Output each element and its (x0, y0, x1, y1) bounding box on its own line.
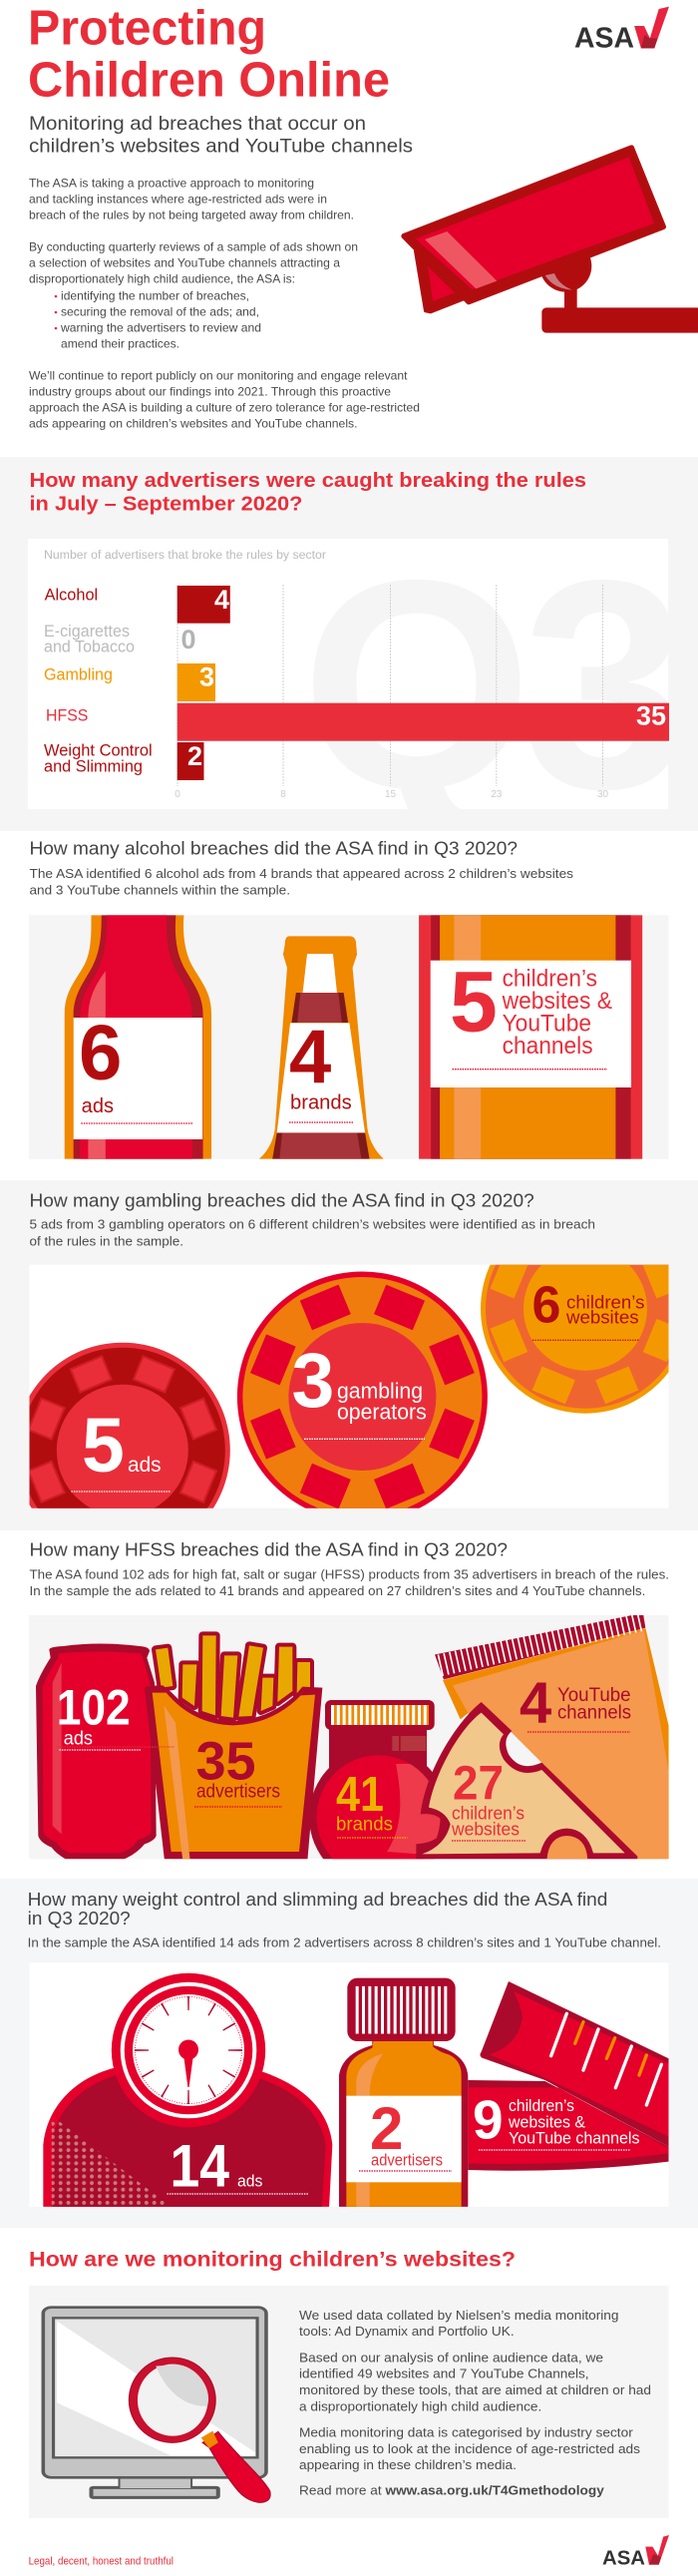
stat: 2 advertisers (359, 2095, 452, 2171)
intro text: We’ll continue to report publicly on our monitoring and engage relevant (29, 369, 408, 383)
stat: 27 children's websites: websites (451, 1818, 520, 1839)
bar: Alcohol (45, 585, 230, 624)
panel: gambling (30, 1265, 668, 1508)
stat: 5 ads (71, 1403, 171, 1492)
gridlines and axis ticks: 0 (174, 789, 180, 800)
bar: E-cigarettes and Tobacco: 0 (181, 625, 196, 654)
stat: 35 advertisers: 35 (195, 1731, 256, 1791)
title: Protecting (28, 2, 266, 56)
icon: bottle one: 6 (79, 1009, 122, 1096)
stat: 27 children's websites: children’s (452, 1802, 524, 1823)
bar: Weight Control and Slimming (44, 740, 203, 780)
icon: bottle three: children’s (503, 965, 597, 992)
panel: alcohol (29, 915, 668, 1159)
chart subtitle: Number of advertisers that broke the rules by sector (44, 550, 326, 562)
text: methodology: Media monitoring data is categorised by industry sector (299, 2425, 633, 2439)
icon: chip left (30, 1343, 230, 1508)
footer tagline: Legal, decent, honest and truthful (29, 2556, 174, 2568)
stat: 35 advertisers: advertisers (196, 1781, 280, 1803)
icon: bottle one: ads (82, 1095, 114, 1117)
icon: magnifying glass (129, 2358, 270, 2502)
stat: 4 YouTube channels: channels (557, 1701, 631, 1723)
intro text: breach of the rules by not being targeted away from children. (29, 209, 354, 222)
stat: 35 advertisers (194, 1731, 282, 1807)
stat: 14 ads: 14 (170, 2133, 230, 2200)
text: weight control summary: In the sample the ASA identified 14 ads from 2 advertisers across 8 children’s sites and 1 YouTube channel. (28, 1936, 661, 1950)
stat: 4 YouTube channels: 4 (520, 1671, 551, 1736)
panel: weight control (30, 1962, 669, 2210)
stat: 14 ads (167, 2133, 308, 2200)
text: HFSS summary: The ASA found 102 ads for high fat, salt or sugar (HFSS) products from 35 advertisers in breach of the rules. (30, 1568, 669, 1582)
stat: 6 children's websites: 6 (532, 1277, 560, 1335)
bar: Gambling: 3 (199, 662, 214, 692)
stat: 41 brands: 41 (336, 1768, 384, 1822)
heading: weight control breaches: in Q3 2020? (28, 1909, 131, 1929)
heading: advertisers caught: in July – September 2020? (30, 494, 303, 516)
stat: 27 children's websites (451, 1757, 525, 1841)
icon: bottle three (419, 915, 642, 1159)
icon: jar (310, 1700, 445, 1860)
heading: weight control breaches (28, 1890, 607, 1929)
stat: 2 advertisers: 2 (370, 2095, 403, 2162)
logo: ASA footer: ASA (602, 2548, 645, 2570)
stat: 5 ads: ads (128, 1454, 162, 1477)
text: methodology: Based on our analysis of online audience data, we (299, 2351, 603, 2364)
title (28, 2, 390, 108)
stat: 9 children's websites and YouTube channels (473, 2088, 640, 2150)
stat: 6 children's websites: websites (565, 1307, 639, 1328)
intro text: industry groups about our findings into 2021. Through this proactive (29, 385, 391, 399)
text: methodology: Read more at www.asa.org.uk/T4Gmethodology (299, 2484, 604, 2498)
icon: bottle three: channels (503, 1033, 593, 1060)
intro text (29, 177, 420, 431)
text: gambling summary: 5 ads from 3 gambling operators on 6 different children’s websites were identified as in breach (30, 1218, 595, 1232)
text: gambling summary: of the rules in the sample. (30, 1234, 183, 1248)
icon: bottle two: 4 (289, 1015, 331, 1099)
text: HFSS summary: In the sample the ads related to 41 brands and appeared on 27 children’s sites and 4 YouTube channels. (30, 1584, 645, 1598)
text: alcohol summary: The ASA identified 6 alcohol ads from 4 brands that appeared across 2 children’s websites (30, 867, 573, 881)
gridlines and axis ticks (174, 585, 608, 800)
bar: HFSS: 35 (636, 701, 666, 731)
bar: E-cigarettes and Tobacco (44, 622, 196, 656)
intro text: ads appearing on children’s websites and YouTube channels. (29, 417, 357, 431)
stat: 4 YouTube channels (520, 1671, 631, 1736)
stat: 4 YouTube channels: YouTube (557, 1684, 631, 1706)
stat: 27 children's websites: 27 (453, 1757, 504, 1810)
bar: E-cigarettes and Tobacco: E-cigarettes (44, 622, 130, 641)
stat: 3 gambling operators (291, 1338, 427, 1439)
stat: 9 children's websites and YouTube channels: websites & (508, 2112, 586, 2131)
stat: 9 children's websites and YouTube channels: 9 (473, 2088, 504, 2150)
icon: cheese (416, 1702, 637, 1861)
text: methodology (299, 2309, 651, 2498)
logo: ASA top: ASA (574, 23, 634, 55)
icon: chip right (481, 1265, 668, 1414)
bar: HFSS (46, 701, 669, 741)
icon: bottle three: 5 (450, 954, 498, 1050)
bar: Weight Control and Slimming: 2 (187, 741, 202, 771)
text: gambling summary (30, 1218, 595, 1248)
intro text: disproportionately high child audience, the ASA is: (29, 272, 295, 286)
icon: crisp packet (435, 1603, 669, 1859)
stat: 3 gambling operators: gambling (337, 1379, 423, 1404)
stat: 102 ads: 102 (57, 1679, 131, 1735)
stat: 102 ads: ads (64, 1728, 93, 1749)
heading: alcohol breaches: How many alcohol breaches did the ASA find in Q3 2020? (30, 839, 518, 859)
panel: monitoring (29, 2286, 668, 2518)
panel: bar chart (28, 539, 669, 809)
icon: monitor (43, 2308, 266, 2497)
text: alcohol summary: and 3 YouTube channels within the sample. (30, 884, 290, 898)
bar: Alcohol: Alcohol (45, 586, 98, 605)
heading: monitoring websites: How are we monitoring children’s websites? (29, 2249, 516, 2272)
bar: Gambling: Gambling (44, 665, 113, 684)
intro text: a selection of websites and YouTube channels attracting a (29, 256, 340, 270)
stat: 5 ads: 5 (82, 1403, 125, 1489)
logo: ASA footer (602, 2535, 669, 2570)
title: Children Online (28, 54, 390, 108)
icon: drink can (36, 1643, 157, 1860)
intro text: identifying the number of breaches, (61, 289, 249, 303)
heading: HFSS breaches: How many HFSS breaches did the ASA find in Q3 2020? (30, 1539, 508, 1559)
stat: 9 children's websites and YouTube channels: YouTube channels (509, 2128, 640, 2147)
text: alcohol summary (30, 867, 573, 898)
text: methodology: identified 49 websites and 7 YouTube Channels, (299, 2367, 589, 2381)
stat: 6 children's websites: children’s (566, 1292, 644, 1313)
stat: 41 brands (336, 1768, 407, 1838)
bar: Gambling (44, 662, 215, 701)
text: methodology: enabling us to look at the incidence of age-restricted ads (299, 2442, 640, 2456)
subtitle: Monitoring ad breaches that occur on (29, 113, 366, 135)
icon: bottle three: websites & (502, 988, 612, 1015)
logo: ASA top (574, 7, 669, 55)
text: methodology: tools: Ad Dynamix and Portfolio UK. (299, 2325, 515, 2339)
intro text: and tackling instances where age-restricted ads were in (29, 193, 327, 207)
heading: gambling breaches: How many gambling breaches did the ASA find in Q3 2020? (30, 1190, 534, 1210)
stat: 6 children's websites (532, 1277, 644, 1340)
text: methodology: a disproportionately high child audience. (299, 2400, 541, 2414)
subtitle (29, 113, 413, 158)
text: methodology: We used data collated by Nielsen’s media monitoring (299, 2309, 619, 2323)
heading: weight control breaches: How many weight control and slimming ad breaches did the ASA find (28, 1890, 607, 1910)
stat: 3 gambling operators: 3 (291, 1338, 334, 1424)
heading: advertisers caught: How many advertisers were caught breaking the rules (30, 470, 586, 492)
bar: HFSS: HFSS (46, 706, 88, 725)
stat: 14 ads: ads (237, 2173, 262, 2191)
icon: bottle three: YouTube (503, 1010, 591, 1037)
intro text: amend their practices. (61, 337, 179, 351)
text: HFSS summary (30, 1568, 669, 1598)
watermark: Q3: Q3 (301, 519, 680, 851)
bar: E-cigarettes and Tobacco: and Tobacco (44, 637, 135, 656)
text: methodology: monitored by these tools, that are aimed at children or had (299, 2383, 651, 2397)
icon: bottle one (65, 915, 211, 1159)
gridlines and axis ticks: 30 (597, 789, 608, 800)
gridlines and axis ticks: 8 (280, 789, 286, 800)
subtitle: children’s websites and YouTube channels (29, 136, 413, 158)
heading: advertisers caught (30, 470, 586, 516)
intro text: securing the removal of the ads; and, (61, 305, 259, 319)
stat: 9 children's websites and YouTube channels: children’s (509, 2096, 574, 2115)
gridlines and axis ticks: 23 (491, 789, 503, 800)
stat: 41 brands: brands (336, 1814, 393, 1835)
intro text: The ASA is taking a proactive approach to monitoring (29, 177, 314, 191)
icon: bottle two: brands (290, 1092, 352, 1114)
icon: chip centre (237, 1271, 488, 1522)
intro text: By conducting quarterly reviews of a sample of ads shown on (29, 240, 358, 254)
bar: Weight Control and Slimming: and Slimming (44, 756, 143, 775)
stat: 2 advertisers: advertisers (371, 2151, 443, 2170)
icon: scale dial (112, 1973, 265, 2127)
icon: scale body (43, 2068, 332, 2208)
icon: bottle two (259, 936, 384, 1159)
stat: 102 ads (57, 1679, 174, 1750)
bar: Alcohol: 4 (214, 585, 229, 615)
icon: measuring tape (468, 1981, 669, 2171)
intro text: approach the ASA is building a culture of zero tolerance for age-restricted (29, 401, 420, 415)
bar: Weight Control and Slimming: Weight Control (44, 740, 153, 759)
intro text: warning the advertisers to review and (60, 321, 261, 335)
icon: security camera (404, 148, 698, 333)
text: methodology: appearing in these children’s media. (299, 2458, 517, 2472)
stat: 3 gambling operators: operators (337, 1399, 427, 1424)
icon: fries (145, 1635, 322, 1861)
icon: pill bottle (339, 1978, 468, 2210)
panel: HFSS (29, 1615, 669, 1860)
gridlines and axis ticks: 15 (385, 789, 396, 800)
